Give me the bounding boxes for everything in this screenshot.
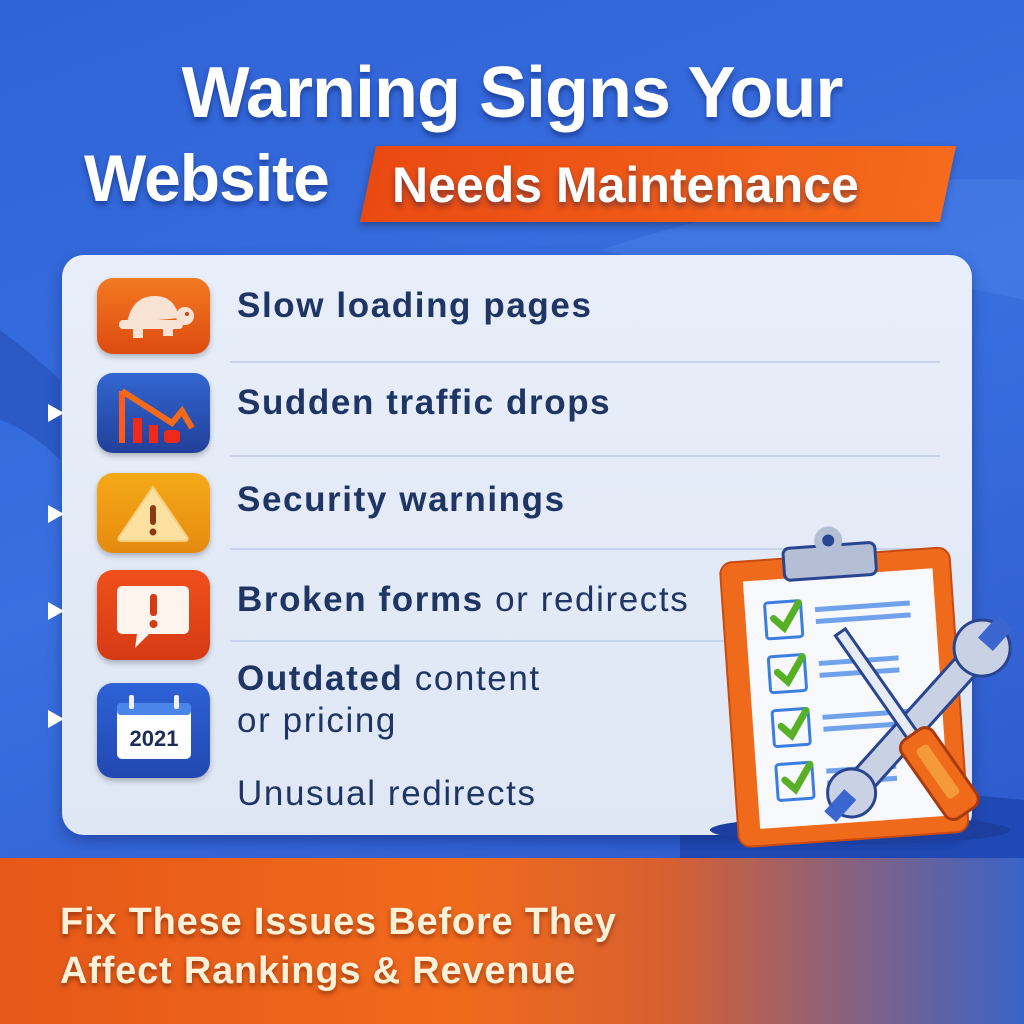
icon: traffic drop	[97, 373, 210, 453]
text: outdated	[237, 659, 541, 740]
banner text: Fix These Issues Before They	[60, 901, 617, 943]
text: slow loading: Slow loading pages	[237, 286, 593, 325]
banner text	[59, 901, 618, 997]
panel: warning signs list	[62, 255, 972, 835]
icon: turtle	[97, 278, 210, 354]
banner text: Affect Rankings & Revenue	[60, 950, 576, 992]
icon: calendar 2021	[97, 683, 210, 778]
title: Website	[84, 141, 329, 215]
text: security: Security warnings	[237, 480, 566, 519]
bottom banner	[0, 858, 1024, 1024]
text: unusual redirects: Unusual redirects	[237, 774, 537, 813]
orange tag	[360, 146, 956, 222]
text: traffic: Sudden traffic drops	[237, 383, 611, 422]
title: Warning Signs Your	[182, 53, 842, 133]
icon: calendar 2021: 2021	[130, 726, 178, 751]
text: outdated: or pricing	[237, 701, 397, 740]
title: Needs Maintenance	[392, 157, 859, 213]
text: broken forms: Broken forms or redirects	[237, 580, 689, 619]
icon: alert bubble	[97, 570, 210, 660]
illustration: clipboard and tools	[710, 526, 1012, 848]
text: outdated: Outdated content	[237, 659, 541, 698]
arrows	[48, 404, 64, 422]
icon: warning	[97, 473, 210, 553]
title	[82, 53, 958, 230]
